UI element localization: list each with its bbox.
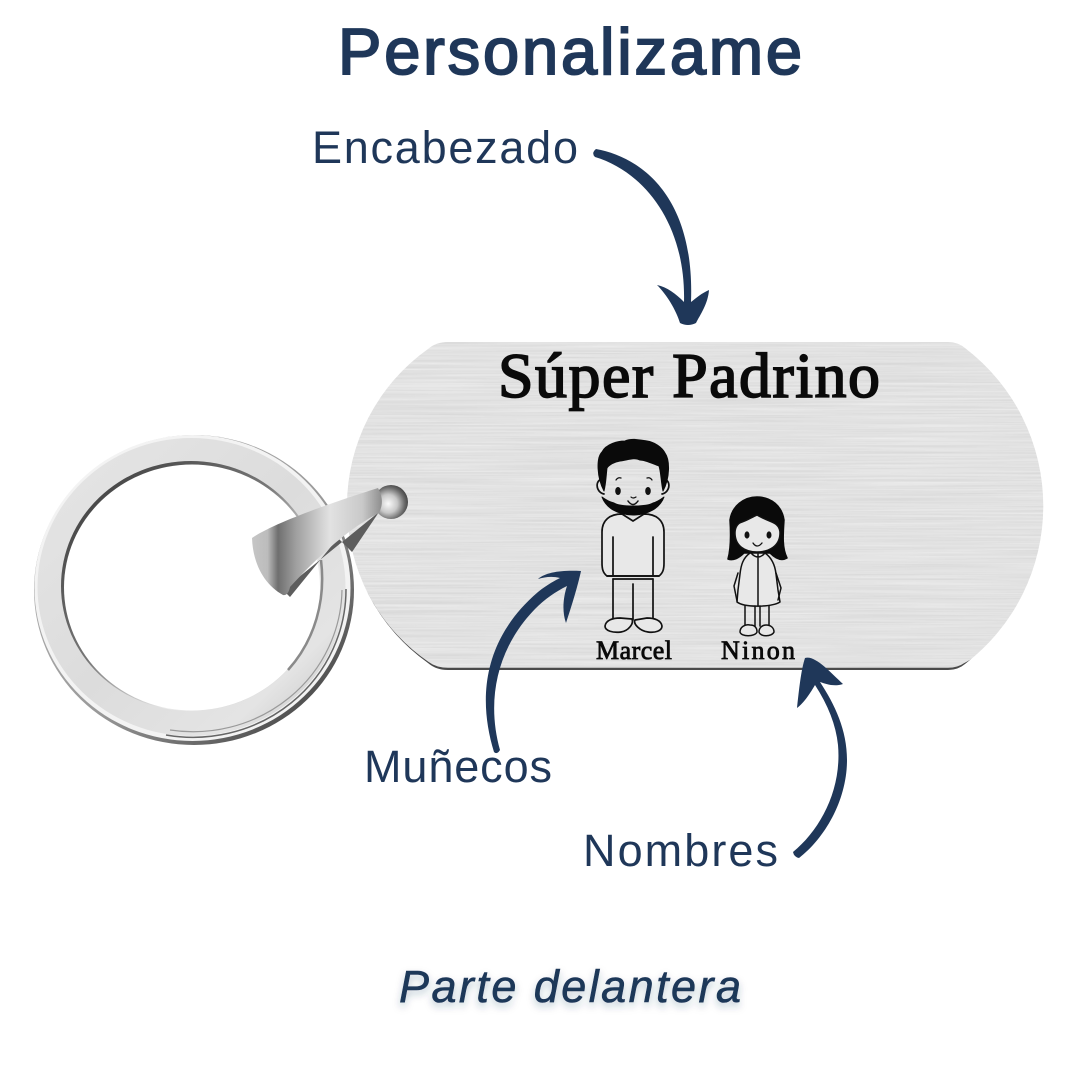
bail ball — [374, 485, 408, 519]
dress — [737, 553, 780, 606]
shoes — [740, 625, 774, 636]
arrow: Nombres to names — [793, 658, 847, 858]
name: Ninon: Ninon — [721, 636, 795, 665]
shoes — [605, 618, 662, 632]
label: Nombres: Nombres — [583, 825, 778, 876]
title: Personalizame — [338, 15, 802, 88]
sweater — [602, 514, 664, 576]
key ring — [34, 435, 354, 745]
caption: Parte delantera — [399, 961, 741, 1012]
legs — [745, 606, 769, 626]
beard — [602, 497, 664, 515]
bail underside — [283, 512, 379, 597]
label: Muñecos: Muñecos — [364, 741, 552, 792]
face details — [615, 478, 652, 504]
face details — [744, 531, 772, 546]
metal tag — [340, 340, 1050, 675]
hair — [598, 439, 669, 491]
arrow: Muñecos to figures — [486, 571, 581, 753]
figure: Ninon — [728, 497, 787, 636]
ears — [597, 479, 669, 494]
hair — [728, 497, 787, 560]
trousers — [613, 579, 653, 620]
name: Marcel: Marcel — [596, 636, 672, 665]
arrow: Encabezado to header — [593, 149, 709, 325]
bail clip — [252, 485, 408, 597]
tag heading: Súper Padrino — [498, 340, 880, 411]
bail band — [252, 488, 382, 595]
figure: Marcel — [597, 439, 669, 632]
face — [735, 515, 780, 552]
label: Encabezado: Encabezado — [312, 122, 578, 173]
